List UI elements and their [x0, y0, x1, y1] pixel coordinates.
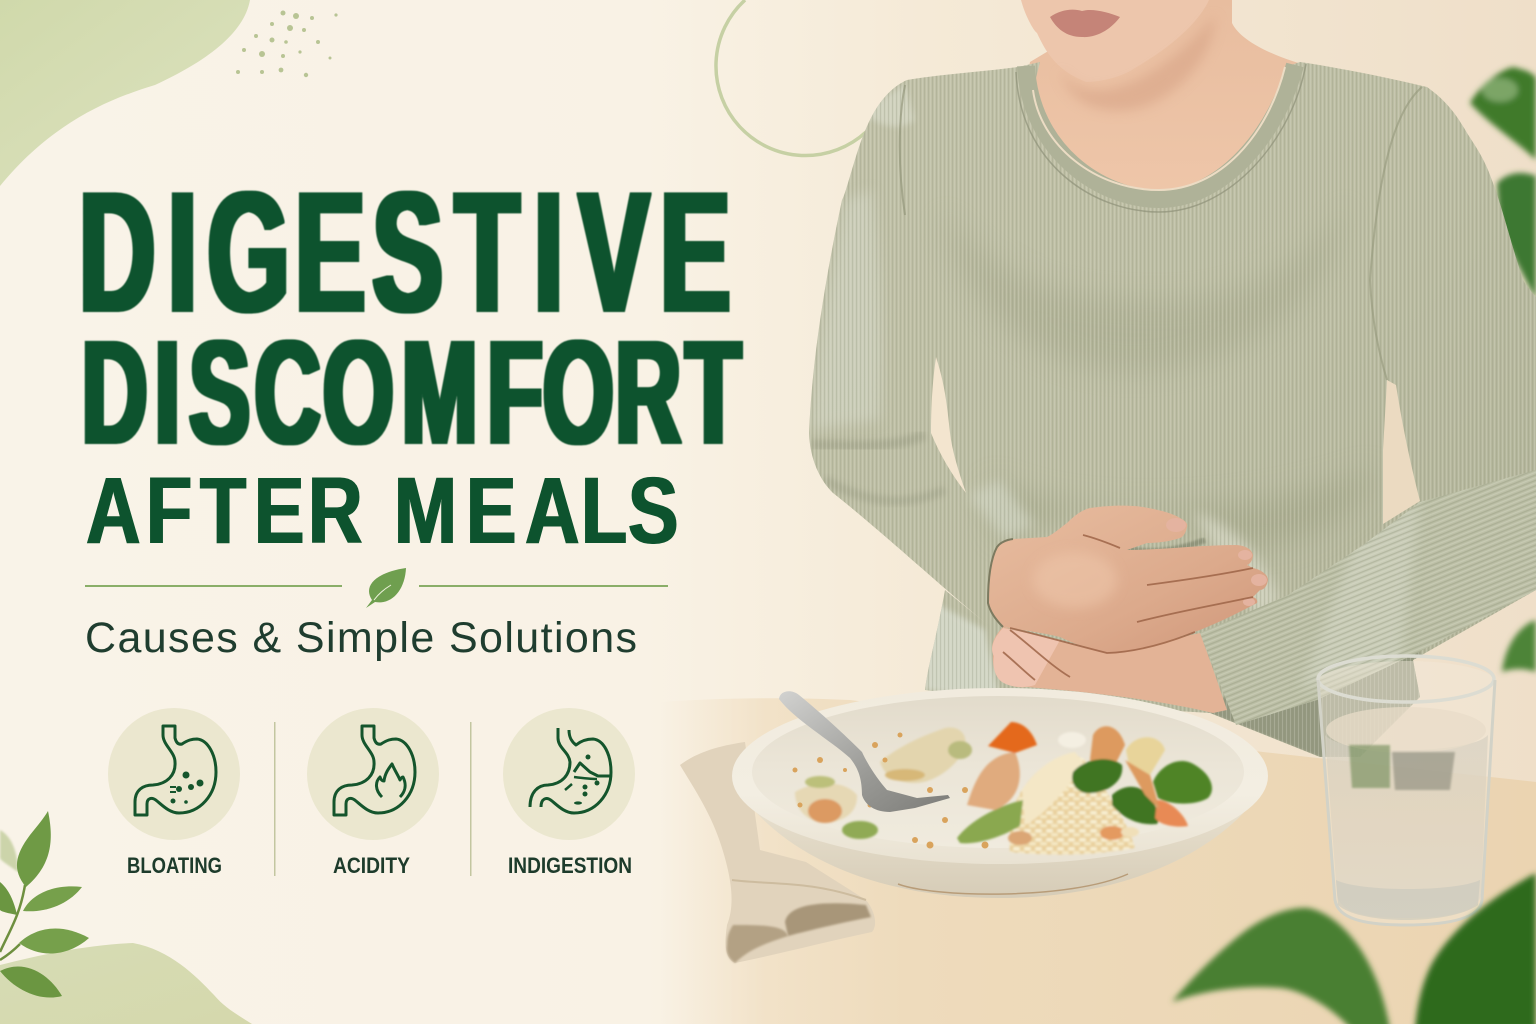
plant: bottom-left leaf sprig — [0, 811, 89, 998]
photo: glass of water — [1317, 656, 1496, 925]
sweater — [809, 62, 1536, 757]
separator — [470, 722, 472, 876]
right forearm sleeve — [1200, 470, 1536, 725]
lips — [1050, 10, 1120, 37]
title line: AFTER MEALS: AFTER MEALS — [86, 459, 678, 564]
hand highlight — [1033, 552, 1117, 608]
food: crumbs patches — [795, 727, 972, 823]
icon: stomach with food particles — [530, 728, 611, 813]
food: small crumbs — [792, 732, 988, 848]
separator — [274, 722, 276, 876]
photo: plate — [732, 688, 1268, 898]
face — [1021, 0, 1209, 82]
icon: leaf — [366, 568, 406, 608]
upper hand — [988, 506, 1268, 654]
finger nails — [1166, 518, 1267, 606]
fork — [779, 691, 950, 812]
sweater shading and rib texture — [800, 50, 1536, 770]
icon: stomach with flame — [334, 726, 415, 815]
neck — [1022, 0, 1305, 214]
symptom: indigestion — [503, 708, 635, 878]
food: vegetables — [957, 800, 1023, 843]
subtitle: Causes & Simple Solutions — [85, 614, 637, 662]
collar — [1026, 65, 1295, 199]
blob: bottom-left green shape — [0, 943, 252, 1024]
finger lines — [1003, 535, 1253, 680]
lower fingers — [992, 628, 1060, 687]
arm gaps showing background — [931, 357, 966, 493]
label: INDIGESTION — [508, 853, 632, 878]
blob: top-left green shape — [0, 0, 250, 186]
divider with leaf — [85, 568, 668, 608]
food — [795, 722, 1212, 855]
decorative dots — [236, 10, 338, 77]
label: BLOATING — [127, 853, 222, 878]
bowl body — [752, 808, 1248, 898]
plant: upper-right blurred leaves — [1470, 67, 1536, 672]
title line: DISCOMFORT: DISCOMFORT — [82, 310, 741, 474]
title line: DIGESTIVE: DIGESTIVE — [79, 157, 731, 348]
plant: bottom-right blurred leaves — [1172, 873, 1536, 1024]
label: ACIDITY — [333, 853, 410, 878]
photo: woman — [800, 0, 1536, 770]
decorative ring — [716, 0, 866, 156]
title — [79, 157, 741, 564]
symptom: bloating — [108, 708, 240, 878]
left cuff edge — [988, 539, 1013, 627]
chin shadow — [1060, 15, 1215, 111]
lower hand — [992, 627, 1227, 713]
food: rice — [1010, 756, 1135, 855]
icon: stomach with gas bubbles — [135, 726, 216, 815]
photo: napkin — [680, 742, 875, 963]
photo: table — [660, 698, 1536, 1024]
symptom: acidity — [307, 708, 439, 878]
rim — [732, 688, 1268, 864]
